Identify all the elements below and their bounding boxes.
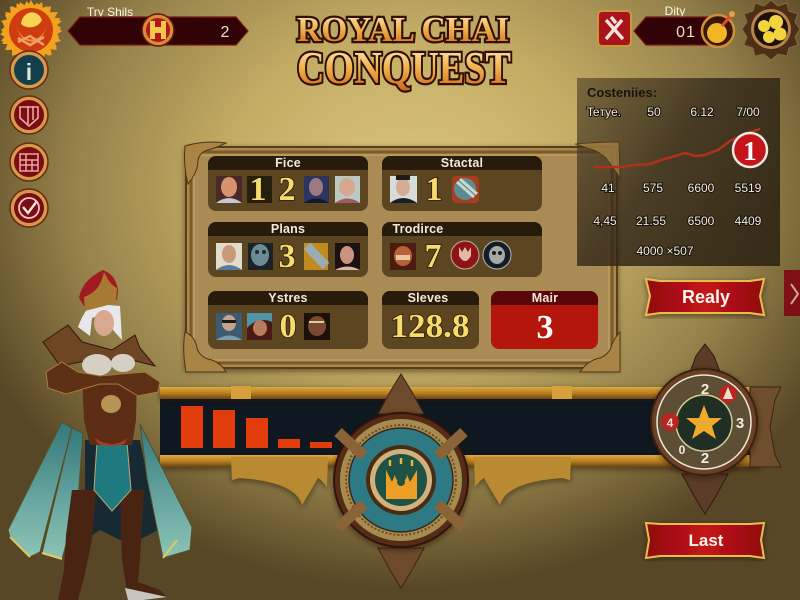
card: Trodirce: Trodirce: [393, 222, 443, 236]
resource bar: Dity: 01: [676, 24, 696, 41]
card: Ystres: [208, 291, 368, 349]
panel: line chart table: Costeniies:: [587, 85, 657, 100]
trend line: [594, 129, 760, 167]
icon: [483, 241, 511, 269]
marker badge: [733, 133, 767, 167]
value: 0: [280, 308, 296, 345]
button: Last: [646, 523, 764, 558]
skirt back: [85, 440, 158, 545]
hat: [79, 270, 118, 306]
icon: map button: [10, 143, 48, 181]
portrait: [216, 176, 242, 203]
dial: star gauge: [651, 344, 757, 514]
torso: [82, 375, 137, 445]
table header row: Teтye.: [587, 105, 621, 119]
icon: [452, 176, 479, 203]
card: Stactal: Stactal: [441, 156, 483, 170]
card: Mair: 3: [536, 309, 554, 346]
ornament: frame corners: [184, 142, 620, 372]
table rows: 4000 ×507: [636, 244, 694, 258]
card: Trodirce: [382, 222, 542, 277]
dial: star gauge: 2: [701, 450, 709, 467]
value: 1: [426, 171, 442, 208]
title: [297, 10, 511, 93]
resource bar: Try Shils: [68, 5, 248, 46]
table rows: 6500: [688, 214, 715, 228]
icon: info button: [10, 51, 48, 89]
portrait: [216, 313, 242, 340]
table header row: 7/00: [736, 105, 760, 119]
value: [247, 171, 272, 208]
resource bar: Dity: Dity: [665, 4, 685, 18]
arms: [46, 362, 160, 396]
icon: check button: [10, 189, 48, 227]
value: 2: [278, 171, 296, 208]
icon: sun emblem: [0, 0, 66, 64]
portrait: [248, 243, 273, 270]
resource bar: Dity: [634, 4, 735, 47]
table header row: [587, 105, 760, 119]
button: Last: Last: [689, 531, 724, 550]
portrait: [390, 175, 417, 203]
warning badges: [661, 413, 679, 431]
dial: star gauge: 2: [701, 381, 709, 398]
button: Realy: Realy: [682, 287, 730, 307]
hair: [78, 304, 122, 340]
breastplate: [82, 354, 112, 376]
value: 3: [278, 238, 296, 275]
card: Sleves: [382, 291, 479, 349]
card: Mair: Mair: [532, 291, 558, 305]
card: Sleves: Sleves: [408, 291, 448, 305]
rails: [160, 386, 760, 505]
character: armored queen: [8, 270, 192, 600]
table rows: 41: [601, 181, 615, 195]
icon: red tools button: [598, 11, 631, 46]
panel: main stats frame: [186, 147, 617, 368]
dial: star gauge: 0: [679, 443, 686, 457]
portrait: [304, 176, 329, 203]
left skirt panels: [8, 422, 83, 559]
table rows: 4,45: [593, 214, 617, 228]
portrait: [247, 313, 272, 340]
table header row: 50: [647, 105, 661, 119]
card: Fice: [208, 156, 368, 211]
card: Fice: Fice: [275, 156, 301, 170]
table rows: [593, 181, 762, 258]
portrait: [216, 243, 242, 270]
face: [94, 310, 114, 336]
value: 1: [250, 171, 266, 208]
value: 7: [424, 238, 442, 275]
table rows: 5519: [735, 181, 762, 195]
icon: info button: i: [26, 59, 32, 85]
portrait: [335, 176, 360, 203]
arrow tab: [784, 270, 800, 316]
resource bar: Try Shils: 2: [221, 24, 230, 41]
table rows: 6600: [688, 181, 715, 195]
boot sole: [125, 588, 167, 600]
icon: [451, 241, 479, 269]
crown icon: [386, 470, 417, 499]
warning badges: 4: [667, 416, 674, 430]
rail right end: [750, 387, 781, 467]
card: Ystres: Ystres: [268, 291, 308, 305]
dial: star gauge: 3: [736, 415, 744, 432]
table rows: 4409: [735, 214, 762, 228]
button: Realy: [646, 279, 764, 315]
card: Plans: [208, 222, 368, 277]
medallion: crown emblem: [334, 374, 468, 588]
panel: line chart table: [575, 78, 780, 266]
panel: bottom bar: [160, 386, 781, 505]
card: Sleves: 128.8: [390, 308, 470, 345]
card: Mair: [491, 291, 598, 349]
title: CONQUEST: [297, 43, 511, 93]
table rows: 21.55: [636, 214, 666, 228]
portrait: [390, 243, 416, 270]
marker badge: 1: [743, 136, 757, 166]
table rows: 575: [643, 181, 663, 195]
shoulders: [43, 325, 155, 366]
icon: shield button: [10, 96, 48, 134]
portrait: [304, 313, 330, 340]
portrait: [335, 243, 360, 270]
center tabard: [94, 442, 131, 511]
resource bar: Try Shils: Try Shils: [87, 5, 133, 19]
card: Stactal: [382, 156, 542, 211]
title: ROYAL CHAI: [297, 10, 509, 49]
frame corner showing through: [575, 142, 620, 178]
card: Plans: Plans: [271, 222, 305, 236]
bar chart: [181, 406, 332, 448]
star: [686, 405, 722, 439]
crossed swords: [338, 432, 464, 528]
icon: ornate settings emblem: [742, 0, 800, 60]
right skirt panel: [140, 424, 192, 558]
warning badges: [719, 385, 737, 403]
legs: [58, 490, 167, 600]
table header row: 6.12: [690, 105, 714, 119]
icon: [304, 243, 328, 270]
